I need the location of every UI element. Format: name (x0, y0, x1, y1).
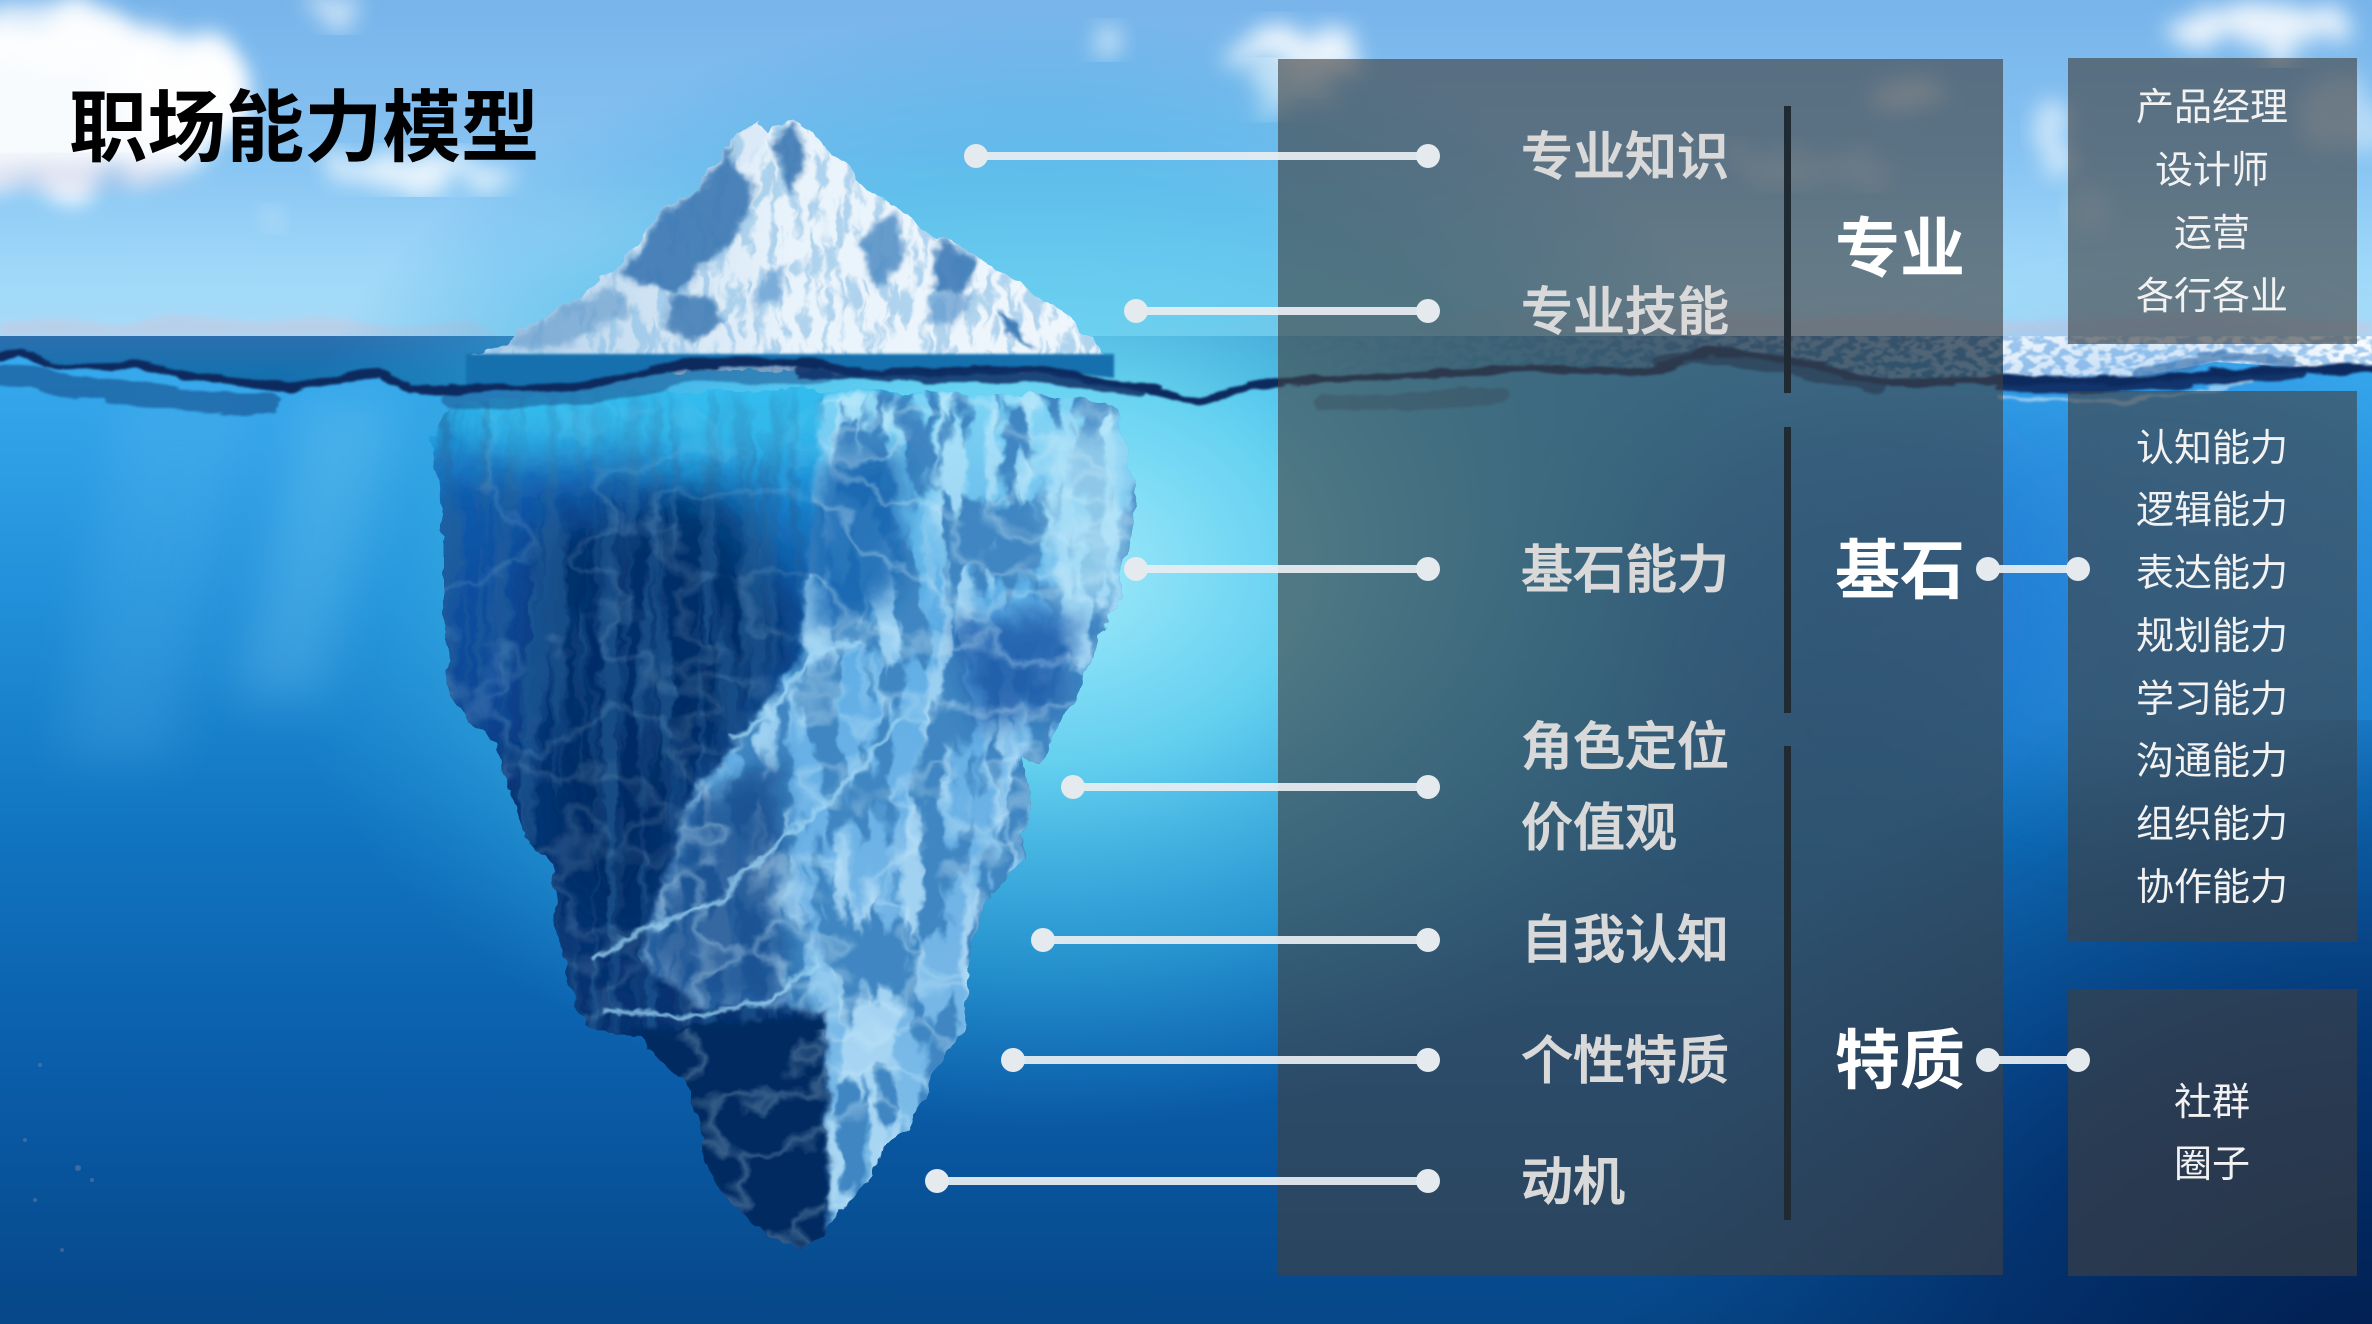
labels: competency items: 价值观 (1521, 800, 1677, 858)
connector: 专业知识 (964, 144, 1440, 168)
list: abilities: 规划能力 (2136, 616, 2288, 658)
list: abilities: 逻辑能力 (2136, 490, 2288, 532)
panel: community (2068, 989, 2357, 1276)
list: abilities: 沟通能力 (2136, 741, 2288, 783)
list: roles (2136, 87, 2288, 318)
vertical dividers (1784, 106, 1791, 1220)
iceberg above water (460, 110, 1120, 380)
heading: 基石: 基石 (1835, 534, 1965, 607)
list: abilities: 组织能力 (2136, 804, 2288, 846)
panel: main knowledge column (1278, 59, 2003, 1275)
list: community: 圈子 (2174, 1144, 2250, 1186)
list: roles: 产品经理 (2136, 87, 2288, 129)
heading: 特质: 特质 (1835, 1024, 1965, 1097)
labels: competency items: 动机 (1521, 1154, 1625, 1212)
connector: 角色定位 价值观 (1061, 775, 1440, 799)
labels: competency items: 个性特质 (1521, 1033, 1729, 1091)
labels: competency items: 基石能力 (1521, 542, 1729, 600)
sea surface band (0, 336, 2372, 406)
labels: competency items: 专业技能 (1521, 284, 1729, 342)
list: community: 社群 (2174, 1082, 2250, 1124)
left dark face (420, 385, 850, 1265)
list: roles: 各行各业 (2136, 276, 2288, 318)
sparkling sea, right side (1526, 336, 2372, 379)
labels: competency items: 角色定位 (1521, 719, 1729, 777)
title: 职场能力模型 (69, 84, 539, 172)
water surface in front of the iceberg (466, 354, 1114, 390)
labels: competency items: 专业知识 (1521, 129, 1729, 187)
bubbles (23, 1063, 94, 1252)
lower left veins (590, 720, 900, 960)
list: roles: 运营 (2174, 213, 2250, 255)
clouds (0, 0, 2372, 270)
labels: competency items (1521, 129, 1729, 1212)
top glow (470, 395, 890, 450)
list: abilities: 协作能力 (2136, 867, 2288, 909)
water line wave (0, 351, 2372, 402)
background: sky (0, 0, 2372, 340)
iceberg below water (420, 385, 1150, 1265)
list: abilities: 表达能力 (2136, 553, 2288, 595)
list: roles: 设计师 (2155, 150, 2269, 192)
connector: 基石 to abilities (1976, 557, 2090, 581)
connector: 个性特质 (1001, 1048, 1440, 1072)
connector: 特质 to community (1976, 1048, 2090, 1072)
list: abilities (2136, 428, 2288, 909)
right light face (640, 385, 1150, 1265)
connector: 自我认知 (1031, 928, 1440, 952)
list: abilities: 学习能力 (2136, 679, 2288, 721)
connector: 基石能力 (1124, 557, 1440, 581)
list: abilities: 认知能力 (2136, 428, 2288, 470)
panel: professional roles (2068, 58, 2357, 344)
labels: competency items: 自我认知 (1521, 912, 1729, 970)
distant mountains on the horizon (0, 308, 2372, 336)
connector: 专业技能 (1124, 299, 1440, 323)
heading: 专业: 专业 (1835, 212, 1965, 285)
connector: 动机 (925, 1169, 1440, 1193)
panel: cornerstone abilities (2068, 391, 2357, 942)
list: community (2174, 1082, 2250, 1186)
